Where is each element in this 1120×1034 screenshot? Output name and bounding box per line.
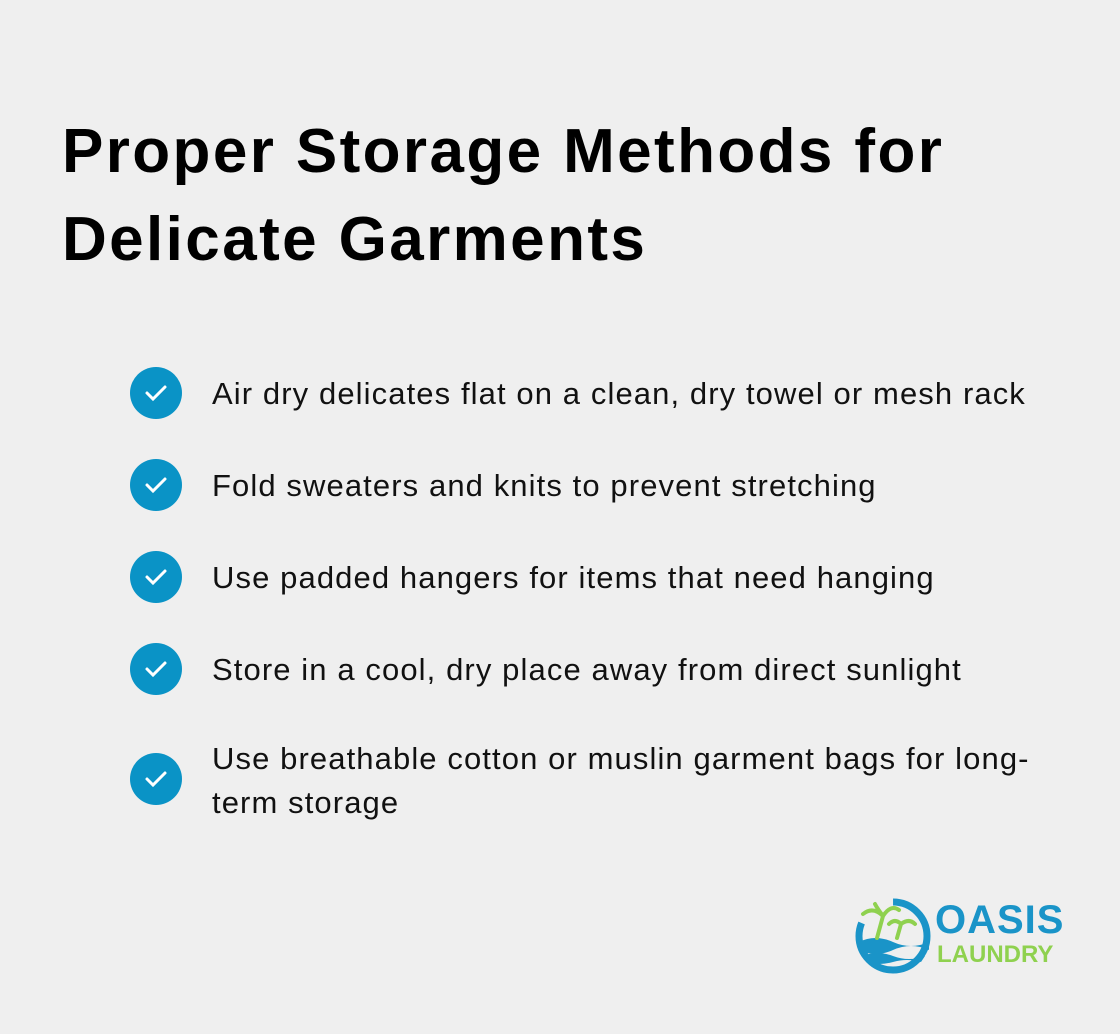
item 4: [130, 643, 962, 695]
text: [212, 741, 1030, 820]
text: term storage: [212, 785, 399, 820]
icon: check: [130, 551, 182, 603]
text: Air dry delicates flat on a clean, dry towel or mesh rack: [212, 376, 1026, 411]
text: Use breathable cotton or muslin garment bags for long-: [212, 741, 1030, 776]
icon: check: [130, 643, 182, 695]
text: Store in a cool, dry place away from direct sunlight: [212, 652, 962, 687]
item 3: [130, 551, 935, 603]
icon: check: [130, 459, 182, 511]
title: [62, 117, 944, 274]
icon: check: [130, 753, 182, 805]
logo: [856, 898, 1064, 974]
logo text: OASIS: [935, 898, 1064, 942]
text: Use padded hangers for items that need hanging: [212, 560, 935, 595]
logo: LAUNDRY: [937, 941, 1053, 968]
icon: check: [130, 367, 182, 419]
title: Delicate Garments: [62, 205, 647, 274]
item 1: [130, 367, 1026, 419]
item 5: [130, 741, 1030, 820]
text: Fold sweaters and knits to prevent stretching: [212, 468, 877, 503]
title: Proper Storage Methods for: [62, 117, 944, 186]
item 2: [130, 459, 877, 511]
icon: palm circle: [856, 898, 930, 974]
